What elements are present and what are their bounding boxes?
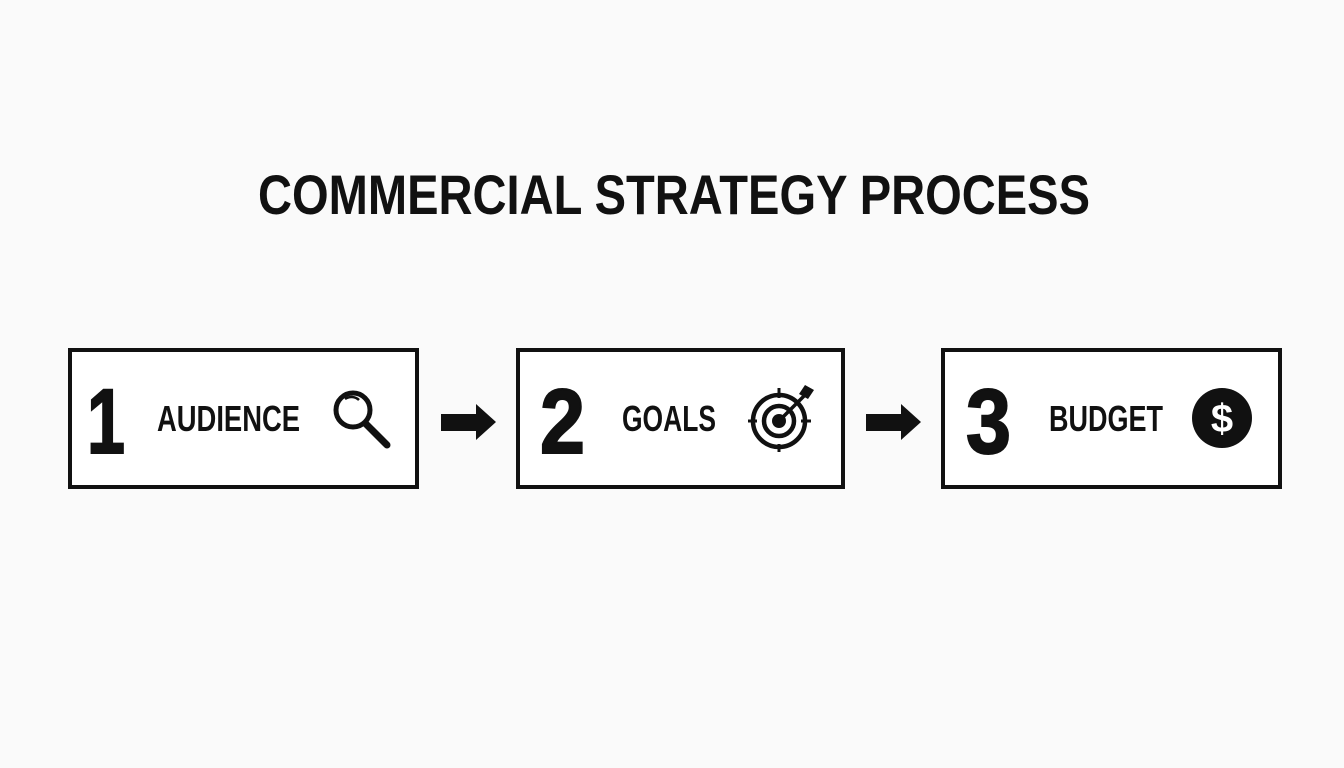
icon: magnifier bbox=[336, 393, 387, 445]
label goals: GOALS bbox=[622, 398, 716, 439]
panel: step 2 goals bbox=[518, 350, 843, 487]
icon: dollar coin bbox=[1192, 388, 1252, 448]
icon: dollar coin: $ bbox=[1211, 397, 1233, 441]
icon: target bbox=[748, 385, 814, 452]
number 2: 2 bbox=[540, 371, 585, 473]
panel: step 3 budget bbox=[943, 350, 1280, 487]
panel: step 1 audience bbox=[70, 350, 417, 487]
number 1: 1 bbox=[87, 371, 125, 473]
arrow 1 bbox=[441, 404, 496, 440]
number 3: 3 bbox=[966, 371, 1011, 473]
label audience: AUDIENCE bbox=[157, 398, 300, 439]
arrow 2 bbox=[866, 404, 921, 440]
label budget: BUDGET bbox=[1049, 398, 1163, 439]
title: COMMERCIAL STRATEGY PROCESS bbox=[258, 163, 1090, 226]
